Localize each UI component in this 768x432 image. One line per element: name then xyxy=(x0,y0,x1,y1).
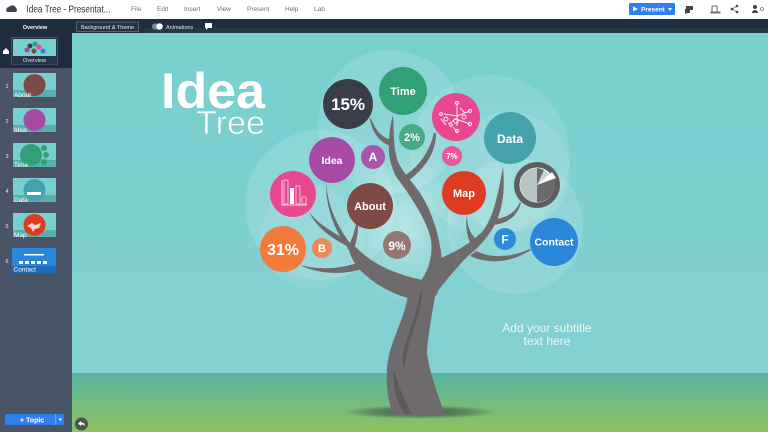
slide 2 thumbnail: Idea xyxy=(14,127,27,134)
present button xyxy=(629,3,675,15)
slide 6 thumbnail: 6 xyxy=(5,259,9,265)
right limb xyxy=(432,167,504,296)
present button: Present xyxy=(641,6,666,14)
node: About xyxy=(347,183,393,229)
ground shadow xyxy=(342,405,498,419)
node: Data: Data xyxy=(497,132,523,146)
branch: map node xyxy=(466,215,477,246)
subtitle: text here xyxy=(524,334,571,348)
node: Data xyxy=(484,112,536,164)
node: Map: Map xyxy=(453,188,475,200)
node: 2% xyxy=(399,124,425,150)
subtitle xyxy=(502,321,592,348)
node: Idea xyxy=(309,137,355,183)
slide 4 thumbnail: Data xyxy=(14,197,28,204)
add topic button: + Topic xyxy=(20,418,44,424)
menu items: View xyxy=(217,6,231,13)
icon: cloud logo xyxy=(6,5,17,12)
menu items: Insert xyxy=(184,6,200,13)
title: Idea xyxy=(161,63,266,119)
branch: 15% xyxy=(370,118,391,146)
sidebar xyxy=(0,33,72,432)
slide 6 thumbnail xyxy=(5,248,56,274)
icon: network xyxy=(440,101,472,133)
icon: comment xyxy=(205,23,212,30)
node: Contact: Contact xyxy=(534,236,574,248)
slide 5 thumbnail: 5 xyxy=(5,224,9,230)
branch: network node xyxy=(404,133,436,181)
left limb xyxy=(348,243,438,298)
node: F xyxy=(494,228,516,250)
node: Time: Time xyxy=(390,86,416,98)
node: 31%: 31% xyxy=(267,242,299,259)
bark shading xyxy=(393,370,412,414)
node: 15%: 15% xyxy=(331,95,365,114)
node: B: B xyxy=(318,243,326,255)
top menu bar xyxy=(0,0,768,19)
branch: idea node xyxy=(326,183,353,248)
title: Tree xyxy=(196,104,265,141)
slide 2 thumbnail xyxy=(5,108,56,134)
node: pie chart xyxy=(514,162,560,208)
back button xyxy=(75,418,88,430)
document title: Idea Tree - Presentat... xyxy=(26,4,110,16)
branch: pie node xyxy=(490,202,521,225)
slide 3 thumbnail: Time xyxy=(14,162,29,169)
node: 9% xyxy=(383,231,411,259)
branch: 31% node xyxy=(300,263,362,273)
node: 31% xyxy=(260,226,306,272)
node: 15% xyxy=(323,79,373,129)
node: About: About xyxy=(354,201,386,213)
slide 1 thumbnail xyxy=(5,73,56,99)
node: B xyxy=(312,238,332,258)
icon: bars xyxy=(282,180,307,205)
translucent halo circles xyxy=(245,50,583,305)
animations toggle: Animations xyxy=(166,25,193,31)
tree xyxy=(300,115,531,415)
node: 7%: 7% xyxy=(446,152,458,161)
node: A: A xyxy=(369,150,378,164)
slide 4 thumbnail: 4 xyxy=(5,189,9,195)
node: Contact xyxy=(530,218,578,266)
slide 1 thumbnail: About xyxy=(14,92,31,99)
overview thumbnail row xyxy=(0,33,72,68)
slide 3 thumbnail xyxy=(5,143,56,169)
node: 7% xyxy=(442,146,462,166)
node: Time xyxy=(379,67,427,115)
add topic button xyxy=(5,414,64,425)
icon: pie slices xyxy=(520,168,556,202)
node: A xyxy=(361,145,385,169)
slide 3 thumbnail: 3 xyxy=(5,154,9,160)
background and theme button: Background & Theme xyxy=(81,25,134,31)
subtitle: Add your subtitle xyxy=(502,321,592,335)
overview thumbnail row: Overview xyxy=(23,58,46,64)
node: Map xyxy=(442,171,486,215)
node: F: F xyxy=(501,232,509,246)
node: 2%: 2% xyxy=(404,132,420,144)
branch: chart node xyxy=(309,212,349,247)
centre limb xyxy=(389,115,442,296)
node: network icon xyxy=(432,93,480,141)
slide 5 thumbnail xyxy=(5,213,56,239)
slide 2 thumbnail: 2 xyxy=(5,119,9,125)
node: 9%: 9% xyxy=(388,239,406,253)
node: Idea: Idea xyxy=(321,155,343,167)
animations toggle xyxy=(152,23,193,31)
editor toolbar: Overview xyxy=(23,25,48,31)
slide 1 thumbnail: 1 xyxy=(5,84,9,90)
slide 4 thumbnail xyxy=(5,178,56,204)
menu items xyxy=(131,6,325,13)
icons: toolbar actions xyxy=(685,5,764,14)
branch: contact node xyxy=(470,249,531,261)
title xyxy=(161,63,266,141)
menu items: Lab xyxy=(314,6,325,13)
slide 6 thumbnail: Contact xyxy=(14,266,36,274)
node: bar chart xyxy=(270,171,316,217)
menu items: Help xyxy=(285,6,299,13)
branch: about node xyxy=(347,224,358,254)
menu items: Present xyxy=(247,6,270,13)
editor toolbar xyxy=(0,19,768,33)
trunk xyxy=(387,290,445,415)
slide 5 thumbnail: Map xyxy=(14,232,27,239)
menu items: Edit xyxy=(157,6,168,13)
background and theme button xyxy=(76,22,138,32)
menu items: File xyxy=(131,6,142,13)
